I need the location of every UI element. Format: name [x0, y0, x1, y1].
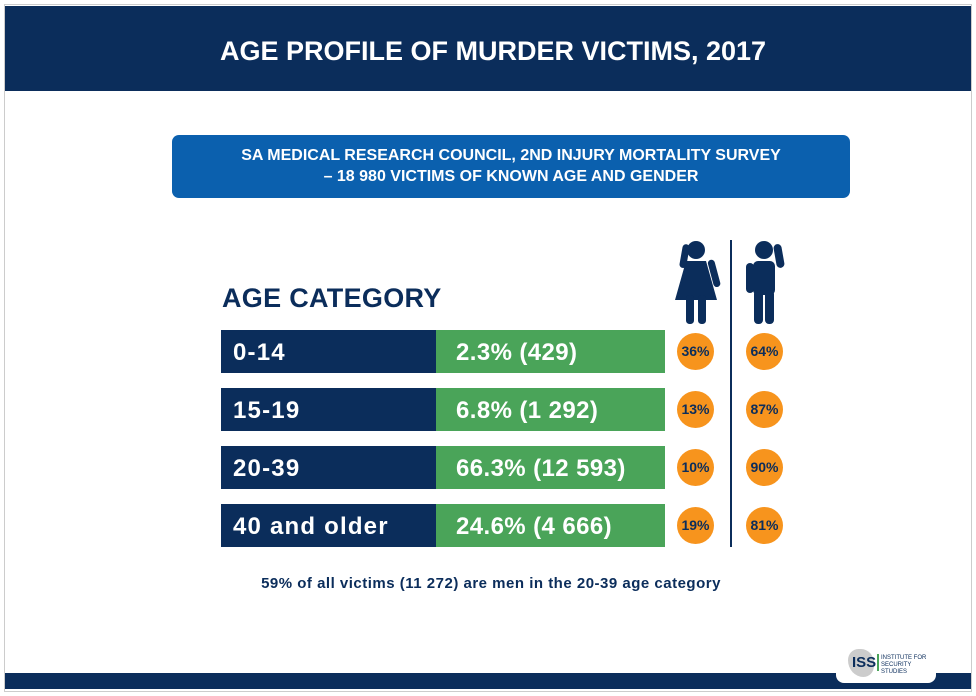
text: 13% [681, 401, 710, 417]
header: AGE PROFILE OF MURDER VICTIMS, 2017 [220, 36, 766, 66]
header [15, 6, 971, 91]
text: 10% [681, 459, 710, 475]
row 15-19: 15-19 [233, 397, 300, 424]
divider line [730, 240, 732, 547]
row 20-39 [221, 446, 665, 489]
row 20-39: 66.3% (12 593) [456, 455, 626, 482]
logo: SECURITY STUDIES [881, 662, 911, 675]
text: 81% [750, 517, 779, 533]
row 20-39: 20-39 [233, 455, 300, 482]
row 15-19 [221, 388, 665, 431]
logo [836, 645, 936, 683]
row 0-14: 2.3% (429) [456, 339, 577, 366]
bottom bar [5, 673, 971, 689]
text: 64% [750, 343, 779, 359]
footnote: 59% of all victims (11 272) are men in the 20-39 age category [261, 575, 721, 592]
age category heading: AGE CATEGORY [222, 283, 442, 313]
text: 19% [681, 517, 710, 533]
subtitle box: SA MEDICAL RESEARCH COUNCIL, 2ND INJURY MORTALITY SURVEY [241, 147, 781, 164]
text: 36% [681, 343, 710, 359]
logo: ISS [852, 654, 876, 671]
text: 87% [750, 401, 779, 417]
row 15-19: 6.8% (1 292) [456, 397, 598, 424]
row 0-14: 0-14 [233, 339, 286, 366]
female percentages [677, 333, 714, 544]
row 0-14 [221, 330, 665, 373]
row 40+: 24.6% (4 666) [456, 513, 612, 540]
subtitle box [172, 135, 850, 198]
male percentages [746, 333, 783, 544]
logo: INSTITUTE FOR [881, 655, 926, 661]
row 40+: 40 and older [233, 513, 389, 540]
text: 90% [750, 459, 779, 475]
row 40+ [221, 504, 665, 547]
icon: male [746, 241, 784, 324]
icon: female [675, 241, 720, 324]
subtitle box: – 18 980 VICTIMS OF KNOWN AGE AND GENDER [324, 168, 698, 185]
